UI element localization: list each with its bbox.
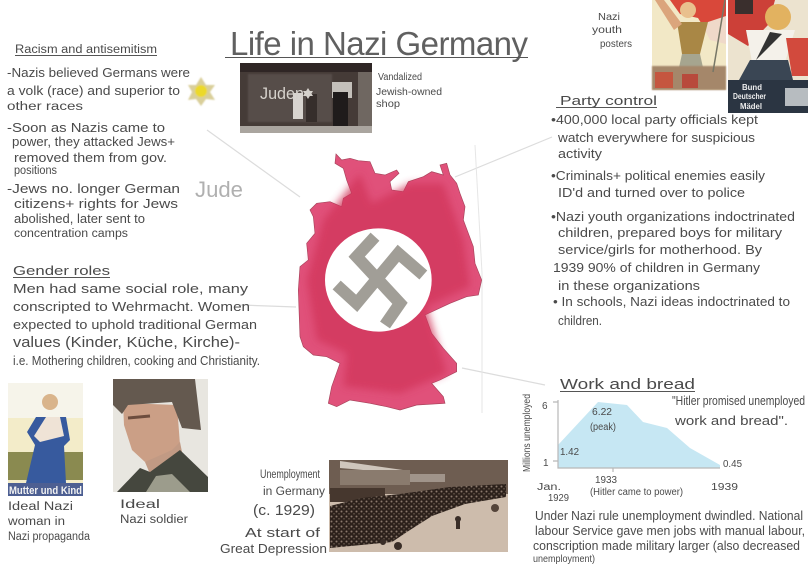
- caption: vandalized shop: shop: [376, 99, 400, 110]
- text: Hitler's promise: work and bread".: [674, 413, 788, 428]
- panel: gender roles: [13, 263, 260, 368]
- caption: unemployment photo: Great Depression: [220, 541, 327, 556]
- text block: work and bread notes: unemployment): [533, 554, 595, 565]
- chart: unemployment area: 1.42: [560, 447, 579, 458]
- text block: work and bread notes: [533, 508, 805, 565]
- caption: youth posters: posters: [600, 39, 632, 50]
- chart: unemployment area: 6.22: [592, 407, 612, 418]
- poster: mother and child: [8, 383, 83, 497]
- text block: gender roles notes: [13, 281, 260, 368]
- text block: gender roles notes: Men had same social role, many: [13, 281, 249, 296]
- text block: racism notes: abolished, later sent to: [14, 211, 145, 226]
- text block: racism notes: -Soon as Nazis came to: [7, 120, 165, 135]
- heading: racism: Racism and antisemitism: [15, 44, 157, 56]
- text block: party control notes: •Nazi youth organizations indoctrinated: [551, 209, 795, 224]
- caption: unemployment photo: Unemployment: [260, 469, 321, 481]
- text block: racism notes: -Jews no. longer German: [7, 181, 180, 196]
- photo: unemployment queue: [329, 460, 508, 552]
- text block: gender roles notes: conscripted to Wehrmacht. Women: [13, 299, 250, 314]
- map: Germany with flag emblem: [298, 154, 482, 410]
- text block: racism notes: removed them from gov.: [14, 150, 167, 165]
- text block: racism notes: positions: [14, 165, 57, 177]
- text block: party control notes: •Criminals+ political enemies easily: [551, 168, 766, 183]
- text block: party control notes: • In schools, Nazi ideas indoctrinated to: [553, 294, 790, 309]
- text block: gender roles notes: values (Kinder, Küche, Kirche)-: [13, 334, 240, 351]
- caption: ideal woman: [7, 501, 91, 543]
- photo: vandalized shop: [240, 63, 372, 133]
- text: Jude: Jude: [195, 177, 243, 202]
- poster: boy with flag: [652, 0, 726, 90]
- chart: unemployment area: [522, 394, 742, 504]
- text: Hitler's promise: [672, 393, 805, 428]
- text block: racism notes: concentration camps: [14, 228, 128, 240]
- poster: girl with flag: Deutscher: [733, 92, 766, 101]
- text block: work and bread notes: conscription made military larger (also decreased: [533, 538, 800, 553]
- caption: vandalized shop: Vandalized: [378, 72, 422, 83]
- text block: racism notes: -Nazis believed Germans were: [7, 65, 190, 80]
- text block: racism notes: citizens+ rights for Jews: [14, 196, 179, 211]
- text block: party control notes: 1939 90% of children in Germany: [553, 260, 761, 275]
- chart: unemployment area: Jan.: [537, 482, 561, 493]
- chart: unemployment area: 0.45: [723, 459, 742, 470]
- chart: unemployment area: Millions unemployed: [522, 394, 533, 472]
- chart: unemployment area: 1933: [595, 475, 617, 486]
- panel: party control: [551, 93, 795, 328]
- text block: gender roles notes: i.e. Mothering children, cooking and Christianity.: [13, 353, 260, 368]
- text block: party control notes: service/girls for motherhood. By: [558, 242, 763, 257]
- text block: party control notes: in these organizations: [558, 278, 701, 293]
- caption: vandalized shop: Jewish-owned: [376, 87, 442, 98]
- portrait: soldier: [113, 379, 208, 492]
- caption: ideal soldier: [120, 499, 188, 526]
- caption: unemployment photo: At start of: [245, 525, 321, 540]
- caption: unemployment photo: (c. 1929): [253, 502, 315, 519]
- text block: racism notes: a volk (race) and superior to: [7, 83, 180, 98]
- text block: racism notes: power, they attacked Jews+: [12, 134, 175, 149]
- caption: vandalized shop: [376, 72, 442, 110]
- caption: youth posters: youth: [592, 25, 622, 36]
- poster: girl with flag: Bund: [742, 83, 762, 92]
- caption: youth posters: [592, 12, 632, 50]
- caption: ideal woman: Ideal Nazi: [8, 501, 73, 513]
- heading: work and bread: Work and bread: [560, 376, 695, 393]
- heading: gender roles: Gender roles: [13, 263, 111, 278]
- text block: racism notes: [7, 65, 190, 240]
- caption: unemployment photo: in Germany: [263, 486, 325, 498]
- caption: ideal soldier: Ideal: [120, 499, 160, 511]
- caption: unemployment photo: [220, 469, 327, 556]
- caption: youth posters: Nazi: [598, 12, 620, 23]
- panel: racism and antisemitism: [7, 44, 243, 240]
- text block: party control notes: [551, 112, 795, 328]
- text block: party control notes: children, prepared boys for military: [558, 225, 783, 240]
- text block: party control notes: ID'd and turned over to police: [558, 185, 745, 200]
- photo: vandalized shop: Juden: [260, 84, 304, 103]
- heading: party control: Party control: [560, 93, 657, 108]
- title: Life in Nazi Germany: [230, 25, 528, 62]
- caption: ideal woman: Nazi propaganda: [8, 531, 91, 543]
- caption: ideal woman: woman in: [7, 516, 65, 528]
- chart: unemployment area: (Hitler came to power): [590, 487, 683, 498]
- chart: unemployment area: 1: [543, 458, 549, 469]
- chart: unemployment area: (peak): [590, 422, 616, 433]
- text block: party control notes: children.: [558, 313, 602, 328]
- panel: work and bread: [522, 376, 805, 565]
- chart: unemployment area: 1939: [711, 482, 739, 493]
- text block: racism notes: other races: [7, 101, 83, 113]
- poster: mother and child: Mutter und Kind: [9, 485, 82, 497]
- chart: unemployment area: 1929: [548, 493, 569, 504]
- poster: girl with flag: [728, 0, 808, 113]
- text block: party control notes: •400,000 local party officials kept: [551, 112, 758, 127]
- icon: yellow star: [188, 77, 215, 106]
- caption: ideal soldier: Nazi soldier: [120, 514, 188, 526]
- poster: girl with flag: Mädel: [740, 102, 762, 111]
- text block: party control notes: activity: [558, 146, 603, 161]
- text block: party control notes: watch everywhere for suspicious: [557, 130, 756, 145]
- text block: gender roles notes: expected to uphold traditional German: [13, 317, 257, 332]
- chart: unemployment area: 6: [542, 401, 548, 412]
